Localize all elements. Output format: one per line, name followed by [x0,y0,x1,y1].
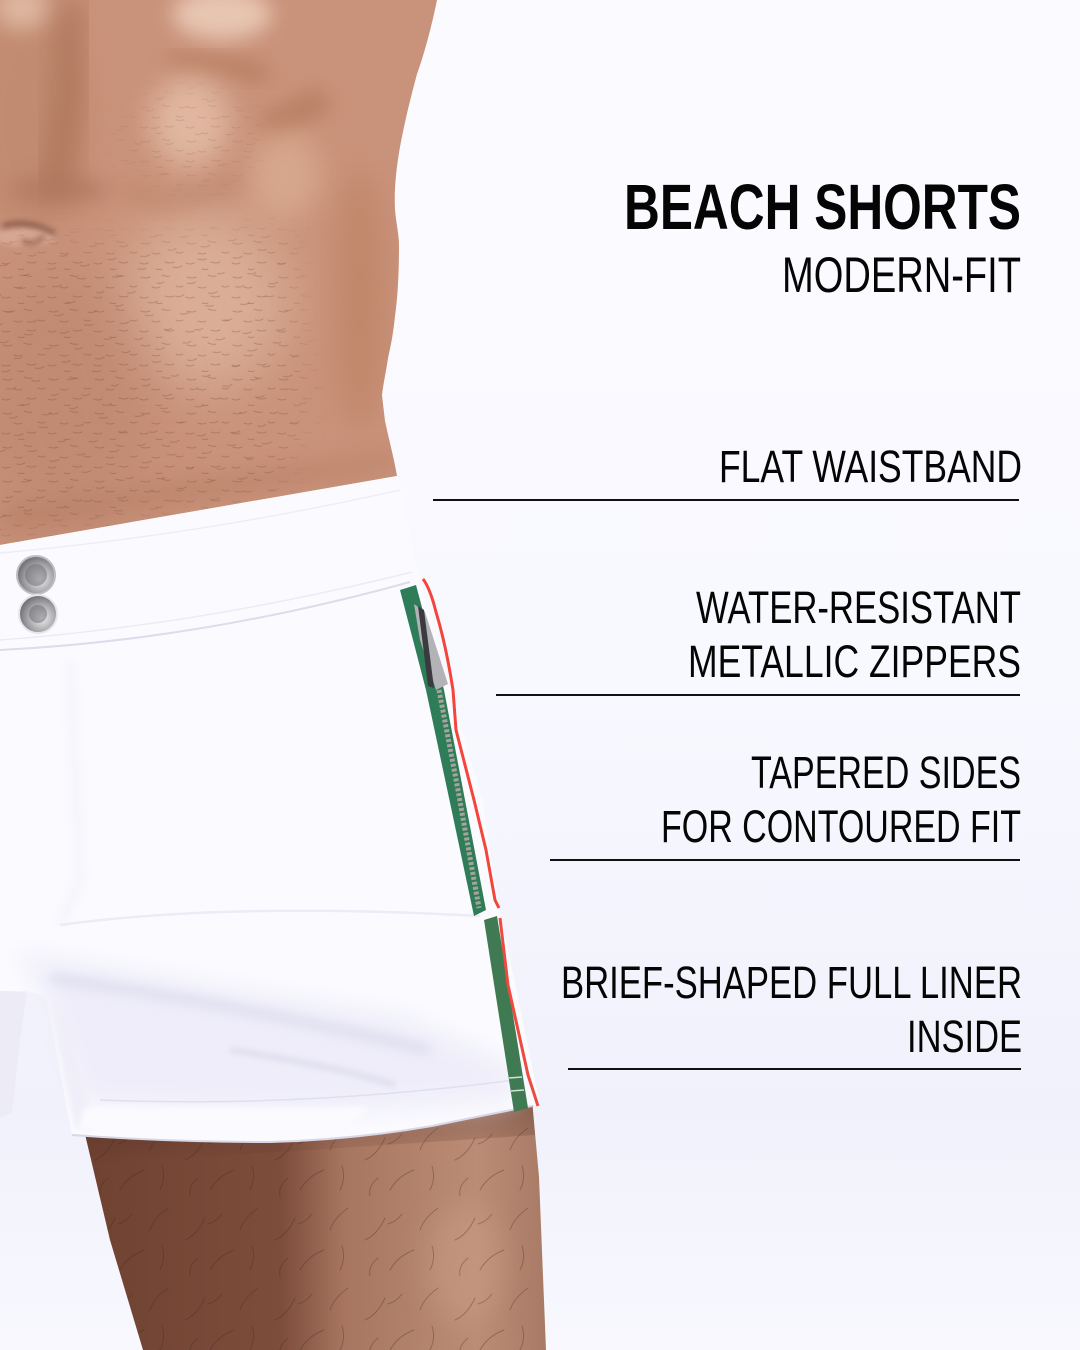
title [624,171,1021,303]
photo: far leg fragment [0,990,27,1118]
callout: tapered sides [550,747,1021,861]
callout: zippers [496,582,1021,696]
photo: white shorts [0,476,540,1142]
photo: torso [0,0,440,550]
photo: thigh [85,1095,555,1350]
zipper tape and side stripes [400,579,538,1112]
callout: liner: INSIDE [907,1011,1022,1062]
icon: buttons [17,556,57,633]
callout: liner [561,957,1022,1070]
